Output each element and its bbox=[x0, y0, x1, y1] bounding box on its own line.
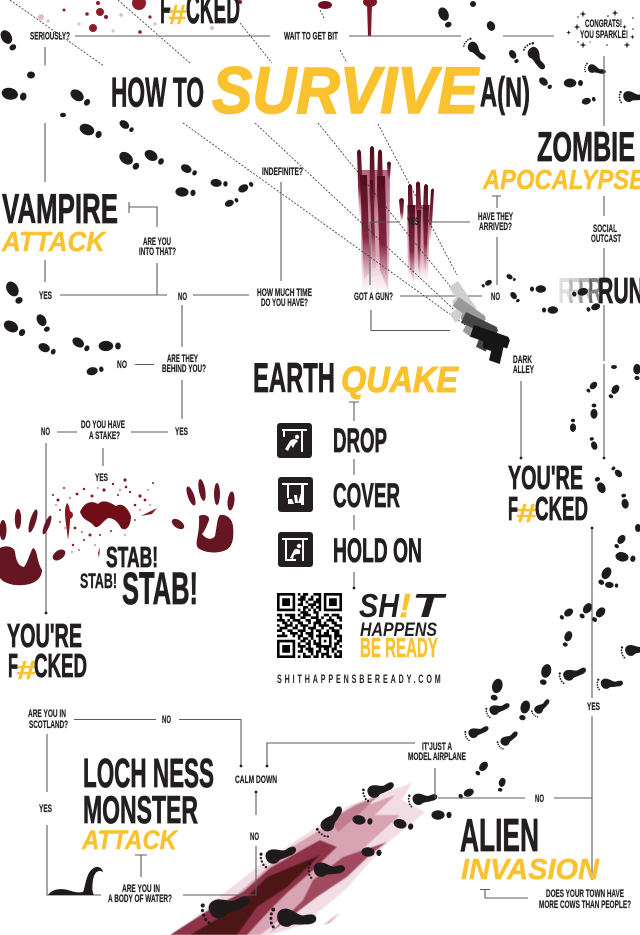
heading: alien invasion: ALIEN bbox=[460, 809, 539, 861]
labels: flow questions and answers: INDEFINITE? bbox=[262, 166, 303, 178]
title: A(N) bbox=[480, 68, 530, 116]
labels: flow questions and answers: NO bbox=[117, 359, 127, 371]
labels: flow questions and answers: NO bbox=[491, 291, 500, 303]
labels: flow questions and answers: ALLEY bbox=[513, 364, 534, 376]
dashed pointer lines bbox=[10, 0, 465, 325]
labels: flow questions and answers: YES bbox=[39, 290, 52, 302]
heading: loch ness monster attack: LOCH NESS bbox=[83, 750, 214, 796]
heading: run motion text bbox=[558, 270, 640, 311]
heading: you're f#cked left: # bbox=[16, 655, 37, 685]
stab stab stab text: STAB! bbox=[80, 570, 117, 593]
labels: flow questions and answers: YES bbox=[407, 216, 419, 228]
labels: flow questions and answers: SOCIAL bbox=[593, 223, 617, 235]
heading: you're f#cked right: YOU'RE bbox=[508, 459, 583, 496]
logo: shit happens be ready bbox=[359, 587, 447, 663]
earthquake heading: EARTH bbox=[253, 354, 335, 401]
blood hand smears bbox=[357, 146, 434, 290]
labels: flow questions and answers: NO bbox=[41, 426, 50, 438]
earthquake heading: QUAKE bbox=[341, 359, 459, 400]
step: hold on bbox=[278, 532, 422, 570]
heading: alien invasion: INVASION bbox=[461, 854, 600, 886]
logo: shit happens be ready: HAPPENS bbox=[360, 620, 437, 641]
congrats sparkle badge bbox=[566, 10, 635, 48]
blood streak with footprints bbox=[170, 779, 452, 935]
labels: flow questions and answers: A STAKE? bbox=[89, 430, 120, 442]
heading: alien invasion bbox=[460, 809, 600, 886]
guns bbox=[437, 281, 511, 365]
website url: SHITHAPPENSBEREADY.COM bbox=[277, 673, 441, 687]
heading: run motion text: R bbox=[568, 270, 584, 311]
logo: shit happens be ready: T bbox=[412, 587, 447, 624]
heading: vampire attack bbox=[1, 185, 118, 257]
heading: zombie apocalypse bbox=[482, 123, 640, 195]
step: drop bbox=[277, 422, 387, 460]
connector end dots bbox=[45, 457, 605, 793]
labels: flow questions and answers: DO YOU HAVE bbox=[81, 419, 125, 431]
labels: flow questions and answers: DO YOU HAVE? bbox=[261, 297, 308, 309]
panel: earthquake bbox=[253, 354, 459, 687]
labels: flow questions and answers: NO bbox=[535, 793, 544, 805]
heading: you're f#cked left: CKED bbox=[34, 647, 87, 684]
shoe prints: right trail bbox=[457, 364, 640, 801]
labels: flow questions and answers: A BODY OF WATER? bbox=[108, 893, 172, 905]
heading: you're f#cked left: F bbox=[8, 647, 18, 684]
bloody handprint left bbox=[0, 509, 67, 585]
step: cover: COVER bbox=[333, 477, 400, 515]
step: cover bbox=[278, 477, 400, 515]
stab stab stab text: STAB! bbox=[106, 542, 158, 574]
labels: flow questions and answers: YES bbox=[39, 803, 52, 815]
labels: flow questions and answers: ARE THEY bbox=[167, 353, 198, 365]
labels: flow questions and answers: WAIT TO GET BIT bbox=[284, 30, 338, 42]
blood splatter: top bbox=[38, 0, 377, 36]
hand smear: small bbox=[399, 182, 434, 282]
heading: loch ness monster attack: MONSTER bbox=[83, 789, 198, 832]
qr code bbox=[277, 593, 342, 658]
footprints on streak bbox=[199, 779, 452, 932]
labels: flow questions and answers: ARRIVED? bbox=[479, 221, 512, 233]
heading: you're f#cked right bbox=[508, 459, 588, 528]
labels: flow questions and answers: ARE YOU bbox=[143, 236, 171, 248]
stab stab stab text: STAB! bbox=[122, 563, 198, 614]
title: HOW TO bbox=[111, 68, 204, 116]
shoe prints: upper left trail bbox=[0, 28, 255, 376]
heading: you're f#cked left bbox=[7, 617, 87, 685]
title bbox=[111, 53, 530, 127]
title: SURVIVE bbox=[212, 53, 480, 127]
step: drop: DROP bbox=[333, 422, 387, 460]
labels: flow questions and answers: NO bbox=[250, 831, 259, 843]
labels: flow questions and answers: SCOTLAND? bbox=[29, 719, 68, 731]
labels: flow questions and answers: HAVE THEY bbox=[478, 211, 513, 223]
labels: flow questions and answers: INTO THAT? bbox=[139, 246, 176, 258]
labels: flow questions and answers: NO bbox=[162, 714, 171, 726]
labels: flow questions and answers: GOT A GUN? bbox=[354, 291, 393, 303]
heading: you're f#cked right: CKED bbox=[535, 490, 588, 527]
labels: flow questions and answers: IT'JUST A bbox=[422, 741, 452, 753]
heading: loch ness monster attack: ATTACK bbox=[81, 825, 179, 855]
heading: you're f#cked right: # bbox=[516, 498, 537, 528]
heading: run motion text: R bbox=[588, 270, 602, 311]
heading: you're f#cked left: YOU'RE bbox=[7, 617, 82, 654]
labels: flow questions and answers: ARE YOU IN bbox=[28, 708, 66, 720]
step: hold on: HOLD ON bbox=[333, 532, 422, 570]
labels: flow questions and answers: DARK bbox=[513, 354, 532, 366]
shoe prints: upper right trail bbox=[436, 1, 640, 314]
labels: flow questions and answers: SERIOUSLY? bbox=[30, 30, 70, 42]
heading: vampire attack: VAMPIRE bbox=[2, 185, 118, 232]
logo: shit happens be ready: ! bbox=[399, 587, 411, 624]
heading: run motion text: R bbox=[578, 270, 594, 311]
labels: flow questions and answers: MODEL AIRPLANE bbox=[408, 751, 466, 763]
stab blood splatter bbox=[52, 478, 157, 558]
logo: shit happens be ready: BE READY bbox=[360, 632, 438, 663]
blood streak bbox=[170, 783, 425, 935]
heading: run motion text: R bbox=[558, 270, 574, 311]
labels: flow questions and answers: ARE YOU IN bbox=[122, 883, 160, 895]
labels: flow questions and answers: CALM DOWN bbox=[235, 774, 277, 786]
stab stab stab text bbox=[80, 542, 198, 614]
heading: you're f#cked right: F bbox=[508, 490, 518, 527]
bloody handprint right bbox=[170, 479, 235, 552]
labels: flow questions and answers: BEHIND YOU? bbox=[162, 363, 206, 375]
hand smear: large bbox=[357, 146, 391, 290]
logo: shit happens be ready: SH bbox=[359, 587, 400, 624]
heading: F#CKED top bbox=[160, 0, 240, 32]
heading: vampire attack: ATTACK bbox=[1, 226, 107, 257]
labels: flow questions and answers: YES bbox=[95, 472, 108, 484]
labels: flow questions and answers: YES bbox=[587, 701, 600, 713]
labels: flow questions and answers: YES bbox=[175, 426, 188, 438]
labels: flow questions and answers: NO bbox=[178, 291, 187, 303]
labels: flow questions and answers: HOW MUCH TIME bbox=[257, 287, 312, 299]
heading: loch ness monster attack bbox=[81, 750, 214, 855]
icon: loch ness monster bbox=[48, 867, 103, 895]
